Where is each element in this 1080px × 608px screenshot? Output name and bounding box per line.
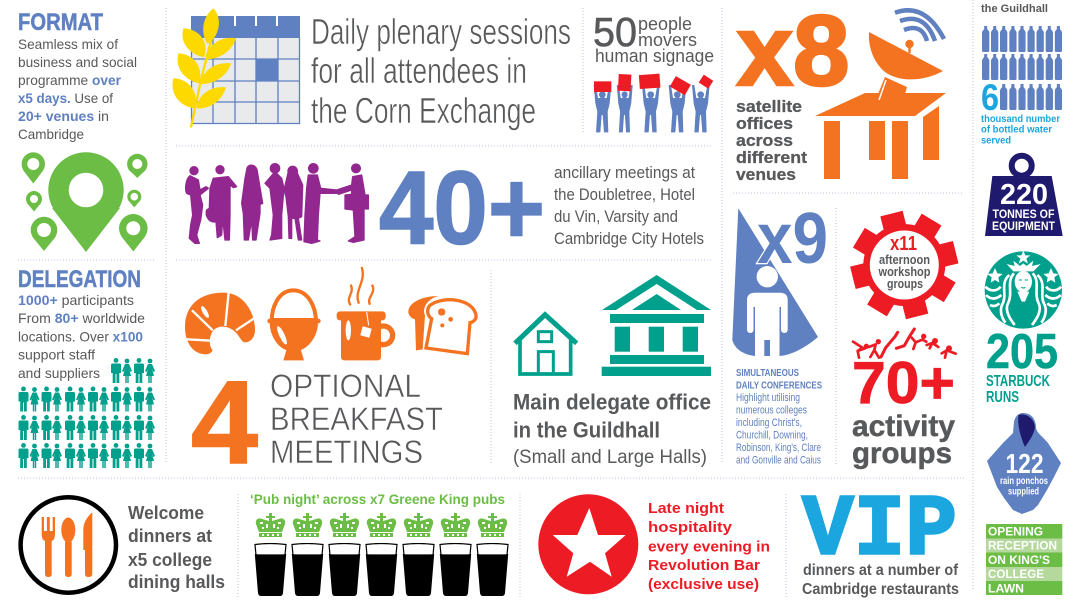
text block: satellite offices: across (736, 131, 793, 150)
panel: late night hospitality (538, 494, 770, 594)
text block: workshop groups (878, 233, 931, 291)
callout: opening reception (986, 524, 1062, 596)
icon: rain poncho: 122 (1006, 448, 1044, 479)
text block: simultaneous conferences: DAILY CONFERENCES (736, 380, 822, 392)
text block: VIP dinners (802, 562, 959, 598)
text block: simultaneous conferences: including Christ's, (736, 417, 802, 429)
text block: optional breakfast meetings (270, 368, 443, 470)
number: 40+: 40+ (379, 150, 545, 266)
text block: workshop groups: x11 (890, 233, 917, 255)
text block: plenary sessions: the Corn Exchange (311, 90, 536, 131)
text block: main delegate office: (Small and Large Halls) (513, 447, 707, 468)
text block: workshop groups: groups (887, 276, 923, 291)
text block: activity groups: groups (852, 437, 952, 470)
icon: jumping figures (853, 329, 956, 358)
icon: house (515, 315, 577, 374)
text block: simultaneous conferences: Robinson, King's, Clare (736, 442, 821, 454)
panel: pub night (250, 491, 508, 596)
text block: simultaneous conferences: Highlight utilising (736, 392, 800, 404)
text block: activity groups: activity (852, 410, 955, 443)
text block: VIP dinners: Cambridge restaurants (802, 581, 959, 598)
panel: delegation (18, 266, 155, 468)
panel: welcome dinners (21, 497, 225, 593)
text block: simultaneous conferences: SIMULTANEOUS (736, 368, 799, 379)
text block: bottled water (981, 113, 1060, 146)
icon: satellite dish on building (815, 10, 946, 179)
panel: plenary sessions (172, 8, 571, 131)
callout: opening reception: RECEPTION (988, 538, 1057, 552)
text block: late night hospitality: (exclusive use) (648, 576, 759, 593)
text block: activity groups (852, 410, 955, 470)
icon: calendar (191, 16, 300, 124)
text block: optional breakfast meetings: BREAKFAST (270, 401, 443, 437)
text block: plenary sessions (311, 11, 571, 131)
text block: simultaneous conferences (736, 368, 822, 466)
text block: starbuck runs: STARBUCK (986, 373, 1051, 390)
icon: tea mug (337, 267, 395, 360)
callout: opening reception: LAWN (988, 582, 1024, 596)
panel: VIP dinners (802, 482, 959, 598)
number: 205: 205 (986, 325, 1058, 379)
icon: spotlight on person (732, 208, 818, 356)
icon: coffee brand logo (985, 251, 1062, 329)
text block: plenary sessions: for all attendees in (311, 50, 527, 91)
icon: weight 220 tonnes: EQUIPMENT (992, 219, 1056, 233)
callout: opening reception: ON KING'S (988, 553, 1050, 567)
text block: workshop groups: afternoon (879, 252, 930, 267)
text block: late night hospitality: Late night (648, 500, 724, 517)
text block: late night hospitality: every evening in (648, 538, 770, 556)
text block: welcome dinners: dining halls (128, 572, 225, 592)
text block: delegation description: support staff (18, 346, 95, 362)
icon: people grid (18, 358, 155, 468)
icon: croissant (185, 292, 255, 354)
text block: 50 people movers (593, 9, 714, 66)
panel: human signage (593, 9, 714, 132)
text block: format description (18, 36, 137, 142)
text block: delegation description: 1000+ participants (18, 292, 134, 308)
text block: main delegate office: in the Guildhall (513, 418, 660, 442)
heading: pub night: ‘Pub night’ across x7 Greene King pubs (250, 491, 505, 507)
text block: format description: x5 days. Use of (18, 90, 113, 106)
text block: 50 people movers: people (638, 14, 692, 34)
icon: rain poncho (987, 413, 1061, 514)
text block: late night hospitality: Revolution Bar (648, 557, 760, 574)
icon: bread (408, 296, 476, 354)
text block: simultaneous conferences: numerous colleges (736, 404, 807, 416)
text block: delegation description: From 80+ worldwide (18, 310, 145, 326)
icon: guildhall building (602, 275, 711, 376)
text block: ancillary meetings: Cambridge City Hotels (554, 230, 704, 248)
text block: optional breakfast meetings: OPTIONAL (270, 368, 421, 404)
heading: format: FORMAT (18, 9, 103, 36)
icon: weight 220 tonnes: TONNES OF (992, 207, 1054, 221)
number: 6 thousand: 6 (981, 77, 999, 118)
text block: format description: Cambridge (18, 126, 84, 142)
text block: 50 people movers: 50 (593, 9, 637, 55)
text block: bottled water: thousand number (981, 113, 1060, 125)
text block: late night hospitality: hospitality (648, 519, 733, 536)
text block: bottled water: of bottled water (981, 124, 1052, 136)
panel: guildhall stats column (981, 3, 1063, 596)
text block: 50 people movers: human signage (595, 46, 714, 66)
text block: format description: 20+ venues in (18, 108, 109, 124)
text block: optional breakfast meetings: MEETINGS (270, 434, 423, 470)
icon: egg cup (267, 290, 321, 360)
text block: simultaneous conferences: Churchill, Downing, (736, 430, 808, 442)
text block: ancillary meetings: du Vin, Varsity and (554, 208, 678, 226)
callout: opening reception: COLLEGE (988, 567, 1044, 581)
icon: weight 220 tonnes (985, 156, 1063, 236)
text block: starbuck runs (986, 373, 1051, 406)
callout: opening reception: OPENING (988, 524, 1043, 538)
icon: business people silhouettes (186, 164, 368, 243)
text block: late night hospitality (648, 500, 770, 593)
panel: format (18, 9, 148, 252)
icon: people holding signs (594, 74, 713, 132)
icon: weight 220 tonnes: 220 (1000, 179, 1048, 211)
number: 4: 4 (191, 357, 258, 489)
heading: VIP: VIP (802, 482, 957, 580)
text block: welcome dinners: x5 college (128, 550, 212, 570)
text block: format description: programme over (18, 72, 122, 88)
number: 70+: 70+ (852, 350, 955, 416)
text block: satellite offices: different (736, 148, 807, 167)
text block: satellite offices (736, 97, 807, 184)
text block: 50 people movers: movers (638, 30, 697, 50)
panel: satellite offices (736, 0, 946, 184)
text block: welcome dinners (128, 503, 225, 592)
text block: delegation description (18, 292, 145, 381)
text block: satellite offices: satellite (736, 97, 802, 116)
panel: breakfast meetings (185, 267, 476, 489)
icon: water bottles (982, 26, 1062, 110)
text block: main delegate office (513, 390, 711, 468)
heading: the Guildhall: the Guildhall (981, 3, 1048, 15)
text block: bottled water: served (981, 134, 1011, 146)
panel: workshop groups (850, 211, 959, 319)
text block: ancillary meetings: ancillary meetings at (554, 164, 695, 182)
icon: crowns (256, 513, 507, 537)
text block: format description: business and social (18, 54, 137, 70)
icon: wheat (172, 8, 236, 127)
text block: delegation description: and suppliers (18, 365, 100, 381)
icon: rain poncho: supplied (1008, 486, 1039, 498)
text block: ancillary meetings (554, 164, 704, 248)
icon: pints of beer (255, 544, 508, 596)
text block: ancillary meetings: the Doubletree, Hotel (554, 186, 695, 204)
icon: plate and cutlery (21, 497, 116, 593)
text block: main delegate office: Main delegate office (513, 390, 711, 414)
icon: gear (850, 211, 959, 319)
panel: simultaneous conferences (732, 199, 828, 466)
panel: main delegate office (513, 275, 711, 468)
text block: VIP dinners: dinners at a number of (803, 562, 959, 579)
text block: format description: Seamless mix of (18, 36, 118, 52)
text block: workshop groups: workshop (878, 264, 931, 279)
text block: starbuck runs: RUNS (986, 389, 1019, 406)
text block: simultaneous conferences: and Gonville and Caius (736, 454, 821, 466)
panel: activity groups (852, 329, 956, 470)
icon: red star (538, 494, 638, 594)
icon: rain poncho: rain ponchos (1000, 476, 1048, 487)
text block: delegation description: locations. Over x100 (18, 328, 143, 344)
icon: map pins (22, 152, 148, 252)
number: x9: x9 (757, 199, 828, 279)
text block: plenary sessions: Daily plenary sessions (311, 11, 571, 52)
panel: ancillary meetings (186, 150, 704, 266)
text block: satellite offices: offices (736, 114, 793, 133)
text block: welcome dinners: Welcome (128, 503, 204, 523)
text block: satellite offices: venues (736, 165, 796, 184)
text block: welcome dinners: dinners at (128, 526, 212, 546)
heading: delegation: DELEGATION (18, 266, 141, 293)
